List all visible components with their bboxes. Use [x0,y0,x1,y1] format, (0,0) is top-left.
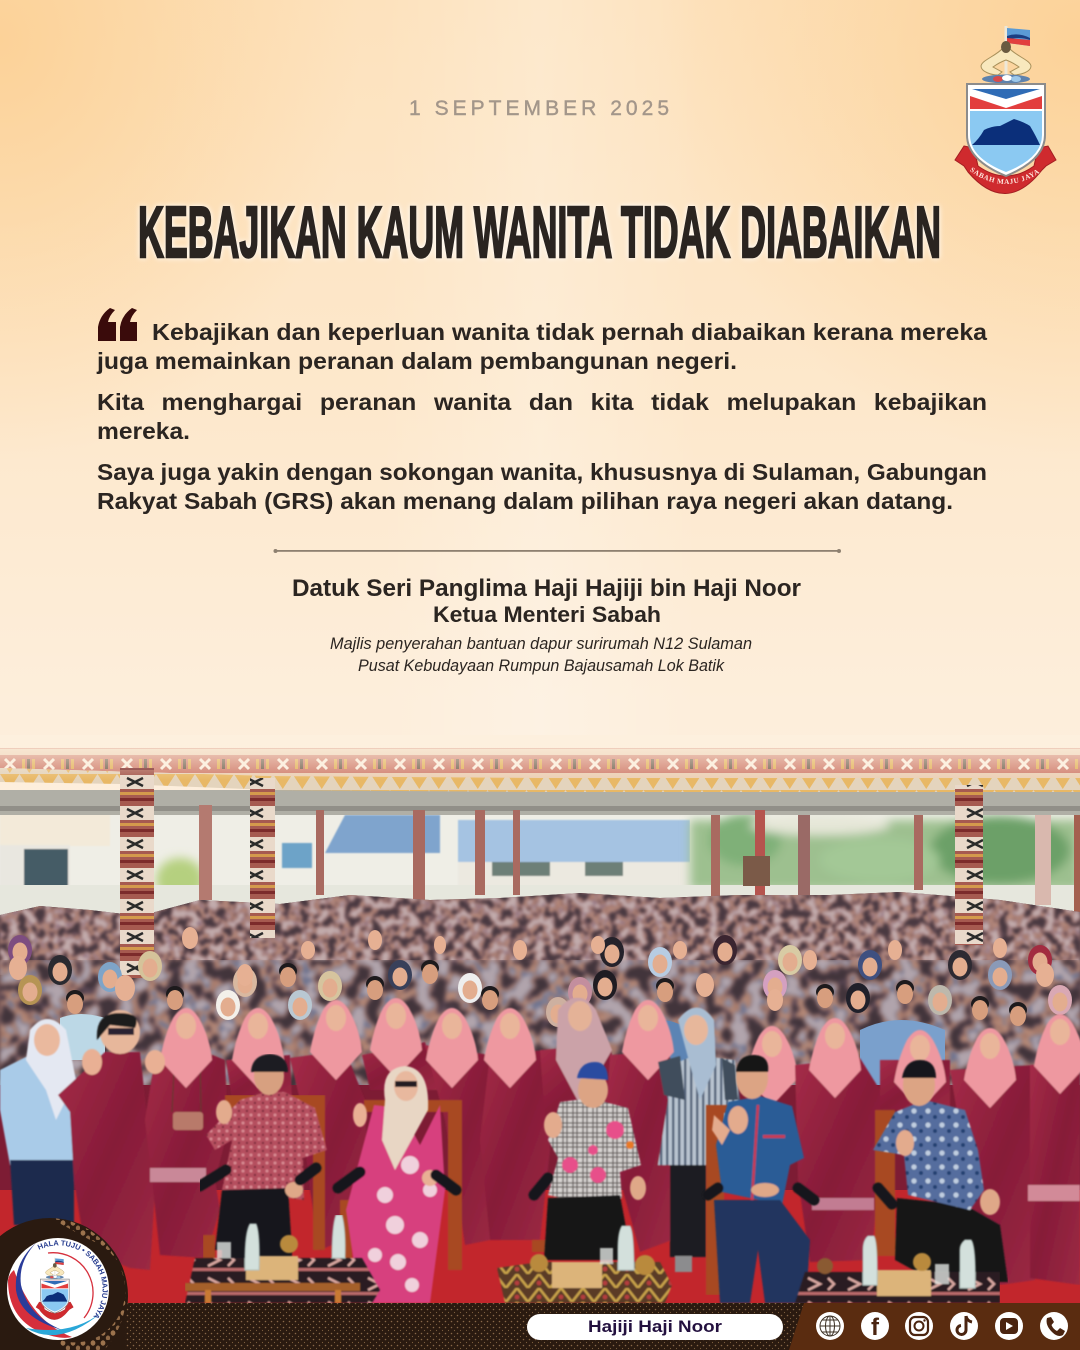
name pill: Hajiji Haji Noor [588,1318,723,1336]
icon: youtube [995,1312,1023,1340]
tables with tissue boxes and bottles [185,1215,1000,1303]
large ornate pillars in front of crowd [120,768,983,978]
quote text: mereka. [97,418,190,444]
back row women right [746,1014,1080,1285]
top fade overlay [0,735,1080,780]
attribution: Ketua Menteri Sabah [433,602,661,627]
date: 1 SEPTEMBER 2025 [409,97,669,120]
back row women centre [540,998,674,1252]
pillars [199,805,1080,925]
quote text: juga memainkan peranan dalam pembangunan negeri. [96,348,737,374]
attribution [292,575,801,675]
divider line [274,549,841,553]
quote text: Kita menghargai peranan wanita dan kita tidak melupakan kebajikan [97,389,987,415]
roof [0,748,1080,815]
woman in glasses [58,1010,155,1270]
footer bar [0,1303,1080,1350]
emblem badge: HALA TUJU • SABAH MAJU JAYA [37,1240,108,1318]
seated woman in pink floral dress [338,1066,456,1303]
quote text [96,319,987,514]
icon: opening quote mark [98,308,137,341]
carpet and maroon backing [0,1085,1080,1305]
group photo [0,735,1080,1305]
quote text: Rakyat Sabah (GRS) akan menang dalam pilihan raya negeri akan datang. [97,488,953,514]
icon: website globe [816,1312,844,1340]
icon: facebook [861,1312,889,1341]
back row women left [226,998,550,1250]
standing women in maroon [0,998,1080,1285]
seated crowd background [0,892,1080,1085]
emblem badge [0,1218,128,1350]
icon: phone [1040,1312,1068,1340]
seated man in navy shirt [708,1055,814,1303]
seated man in floral batik shirt [534,1062,646,1260]
woman with handbag [145,1008,228,1258]
icon: Sabah coat of arms [954,26,1057,194]
social icons [816,1312,1068,1341]
crowd heads [8,927,1072,1100]
icon: tiktok [950,1312,978,1340]
attribution: Datuk Seri Panglima Haji Hajiji bin Haji Noor [292,575,801,602]
icon: facebook: f [871,1314,880,1341]
seated man in red batik shirt [200,1054,327,1260]
name pill [527,1314,783,1340]
woman in light blue [0,1019,78,1225]
attribution: Pusat Kebudayaan Rumpun Bajausamah Lok Batik [358,656,725,675]
woman in grey jacket and blue hijab [658,1008,740,1272]
icon: Sabah coat of arms: SABAH MAJU JAYA [970,168,1040,184]
seated dignitaries [200,1054,1008,1303]
quote text: Kebajikan dan keperluan wanita tidak pernah diabaikan kerana mereka [152,319,987,345]
icon: instagram [905,1312,933,1340]
chairs [203,1095,995,1295]
attribution: Majlis penyerahan bantuan dapur surirumah N12 Sulaman [330,634,752,653]
photo backdrop: buildings and greenery [0,790,1080,930]
quote text: Saya juga yakin dengan sokongan wanita, khususnya di Sulaman, Gabungan [97,459,987,485]
seated man in blue batik shirt [873,1060,1008,1282]
